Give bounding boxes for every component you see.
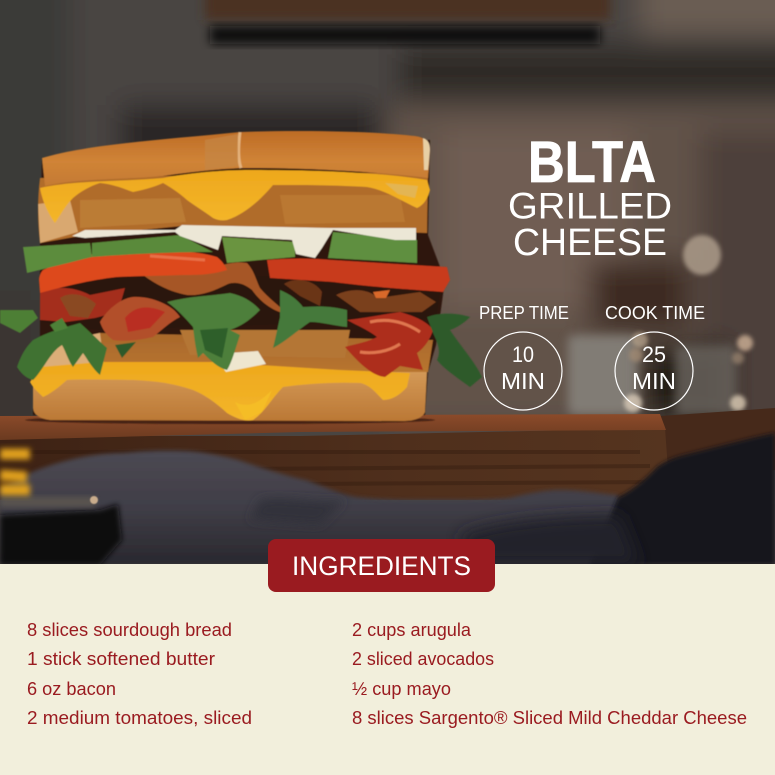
- ingredients list left: [27, 619, 252, 728]
- ingredients list right: 2 sliced avocados: [352, 648, 494, 669]
- ingredients list left: 6 oz bacon: [27, 678, 116, 699]
- bottom cheese: [30, 362, 410, 421]
- upper bread slice under cheese: [38, 172, 428, 243]
- cook time: COOK TIME: [605, 303, 705, 323]
- bottom bread: [33, 370, 427, 421]
- ingredients list left: 8 slices sourdough bread: [27, 619, 232, 640]
- cook time: [605, 303, 705, 410]
- title: CHEESE: [513, 222, 667, 264]
- dark cloth: [0, 433, 775, 565]
- title: BLTA: [528, 130, 656, 195]
- ingredients list left: 1 stick softened butter: [27, 648, 215, 669]
- arugula leaves: [0, 310, 38, 333]
- sandwich base silhouette: [33, 140, 445, 415]
- mayo drizzle: [72, 225, 416, 258]
- top bread crust: [42, 131, 430, 186]
- sandwich shadow: [25, 416, 435, 424]
- ingredients list right: [352, 619, 747, 728]
- mayo: [212, 351, 266, 372]
- prep time: PREP TIME: [479, 303, 569, 323]
- cook time: MIN: [632, 368, 676, 394]
- photo background: [0, 0, 775, 565]
- ingredients panel: [0, 564, 775, 775]
- long bacon: [143, 263, 287, 314]
- avocado: [23, 243, 92, 273]
- sandwich: [0, 131, 482, 424]
- wooden board: [0, 408, 775, 500]
- ingredients banner: INGREDIENTS: [292, 551, 471, 581]
- prep time: 10: [512, 342, 534, 367]
- cook time: 25: [642, 342, 666, 367]
- title: GRILLED: [508, 186, 672, 226]
- prep time: [479, 303, 569, 410]
- ingredients list right: 8 slices Sargento® Sliced Mild Cheddar Cheese: [352, 707, 747, 728]
- bacon pieces: [40, 288, 125, 322]
- tomato: [39, 250, 227, 293]
- lower bread slice: [40, 333, 433, 372]
- top cheese: [40, 170, 430, 223]
- title: [508, 130, 672, 264]
- dark filling band: [40, 276, 440, 330]
- ingredients list left: 2 medium tomatoes, sliced: [27, 707, 252, 728]
- ingredients list right: ½ cup mayo: [352, 678, 451, 699]
- ingredients list right: 2 cups arugula: [352, 619, 472, 640]
- prep time: MIN: [501, 368, 545, 394]
- ingredients banner: [268, 539, 495, 592]
